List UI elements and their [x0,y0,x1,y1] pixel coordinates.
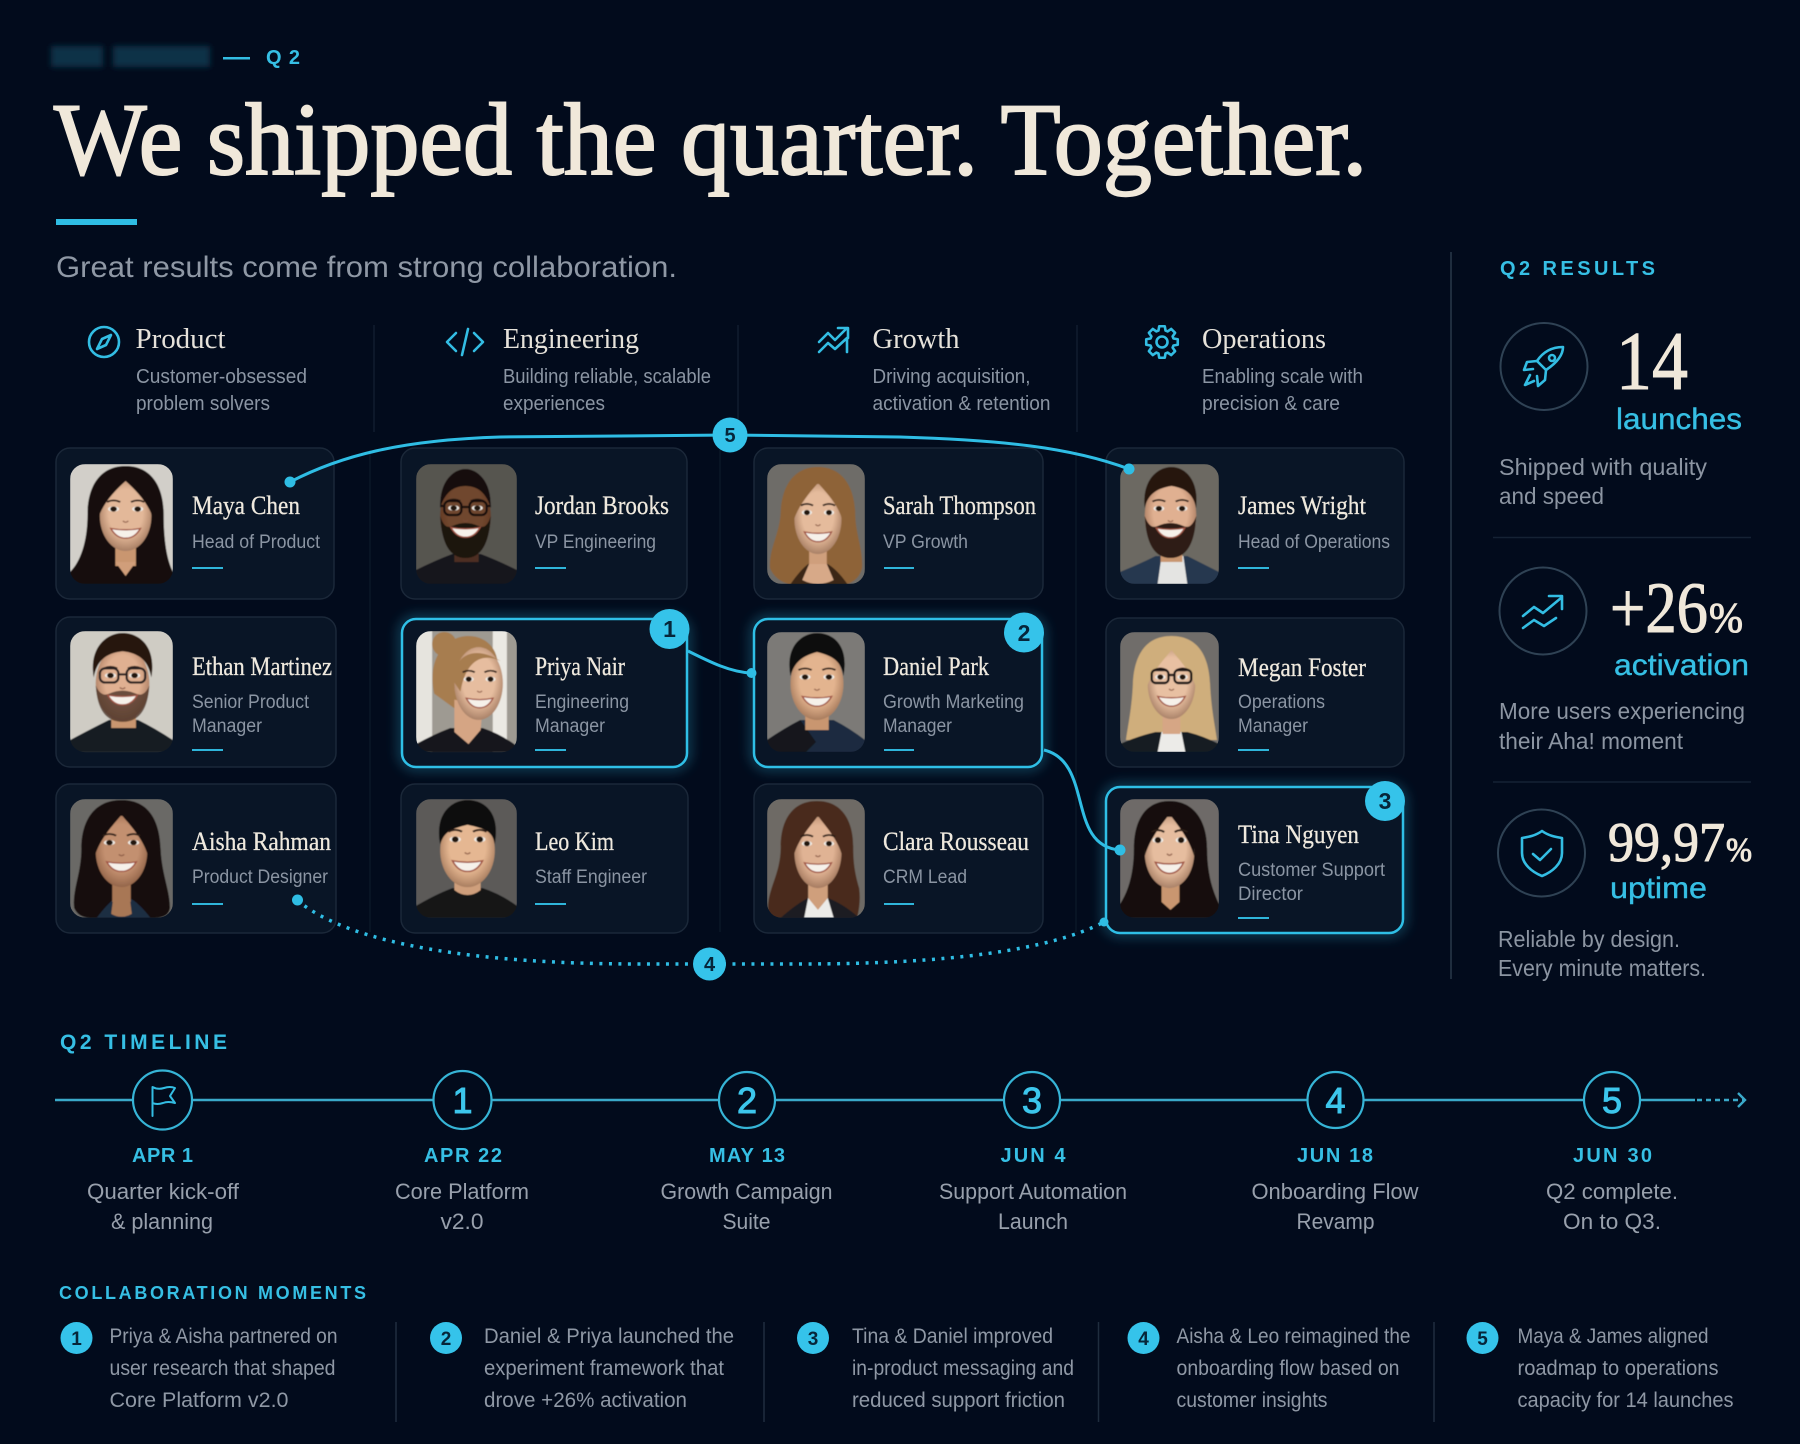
connectors [284,418,1405,980]
milestone: Jun 4 [939,1072,1127,1234]
connector 4: Aisha to Tina, dotted [292,894,1108,980]
portrait: Leo Kim [416,799,517,918]
milestone: Apr 1 [87,1070,240,1234]
stat: 14 launches: launches [1616,403,1742,436]
moment 4: onboarding flow based on [1176,1357,1400,1380]
card: Sarah Thompson [754,448,1043,599]
stat: 99,97% uptime: 99,97 [1608,812,1725,874]
card: Aisha Rahman: Product Designer [192,867,329,888]
milestone: Apr 22: v2.0 [440,1209,484,1234]
card: Ethan Martinez: Ethan Martinez [192,652,332,681]
card: Priya Nair (highlighted): Manager [535,716,606,737]
card: Tina Nguyen (highlighted): Tina Nguyen [1238,820,1359,849]
team header: Engineering [447,324,711,415]
header [51,46,1367,284]
card: Priya Nair (highlighted) [402,619,687,767]
icon: trend [1523,596,1562,628]
badge 2 [1004,612,1044,652]
badge 3: 3 [1379,788,1391,814]
card: Leo Kim: Leo Kim [535,827,614,856]
connector 1: Priya to Daniel [688,651,756,678]
card: Megan Foster: Manager [1238,716,1309,737]
moment 2 [430,1322,734,1412]
connector 5: Maya to James: 5 [724,425,736,447]
moment 2: experiment framework that [484,1357,724,1380]
card: Sarah Thompson: VP Growth [883,532,968,553]
card: Tina Nguyen (highlighted): Customer Support [1238,860,1386,881]
milestone: Apr 1: APR 1 [132,1145,193,1167]
stat: +26% activation: activation [1614,649,1749,682]
card: James Wright: Head of Operations [1238,532,1390,553]
moment 4: Aisha & Leo reimagined the [1176,1325,1410,1348]
milestone: May 13: MAY 13 [709,1145,785,1167]
portrait: Sarah Thompson [767,464,865,584]
moment 4 [1128,1322,1410,1412]
card: Leo Kim [401,784,688,933]
team header: Operations [1146,324,1363,415]
stat: 14 launches: Shipped with quality [1499,454,1708,480]
panel: Q2 results [1451,252,1752,981]
moment 5: Maya & James aligned [1518,1325,1708,1348]
moment 2: 2 [441,1329,451,1350]
card: Clara Rousseau: CRM Lead [883,867,967,888]
milestone: Jun 18: Onboarding Flow [1252,1179,1419,1204]
title: We shipped the quarter. Together. [54,83,1367,197]
moment 5: 5 [1477,1329,1488,1350]
portrait: Tina Nguyen [1120,799,1219,918]
stat: 99,97% uptime: uptime [1610,872,1707,905]
column headers [89,324,1363,415]
moment 3: 3 [808,1329,818,1350]
moment 1: 1 [71,1329,82,1350]
milestone: May 13 [660,1072,832,1234]
team header: Growth: activation & retention [872,393,1050,415]
timeline axis with arrow [55,1093,1745,1107]
moment 3: Tina & Daniel improved [852,1325,1053,1348]
card: Jordan Brooks: Jordan Brooks [535,491,669,520]
moment 4: customer insights [1176,1389,1328,1412]
connector 4: Aisha to Tina, dotted: 4 [704,954,716,976]
moment 2: drove +26% activation [484,1389,687,1412]
icon: shield [1522,831,1562,876]
moment 3 [797,1322,1074,1412]
team header: Growth [819,324,1050,415]
card: Maya Chen [56,448,334,599]
team header: Engineering: experiences [503,393,605,415]
stat: +26% activation [1499,568,1749,754]
card: Jordan Brooks: VP Engineering [535,532,656,553]
card: Megan Foster [1106,618,1404,767]
card: Leo Kim: Staff Engineer [535,867,648,888]
heading: Q2 timeline: Q2 TIMELINE [60,1031,227,1054]
icon: flag [152,1087,175,1116]
collaboration moments [59,1283,1734,1422]
stat: +26% activation: +26 [1610,568,1708,648]
milestone: May 13: Suite [722,1209,770,1234]
moment 4: 4 [1138,1329,1149,1350]
subtitle: Great results come from strong collaboration. [56,251,677,284]
timeline [55,1031,1745,1234]
moment 2: Daniel & Priya launched the [484,1325,734,1348]
moment 1: user research that shaped [110,1357,336,1380]
stat: 99,97% uptime: % [1726,832,1752,869]
eyebrow: redacted label with Q2 [51,46,300,69]
milestone: May 13: 2 [737,1080,757,1121]
card: Daniel Park (highlighted): Manager [883,716,953,737]
card: Megan Foster: Megan Foster [1238,653,1366,682]
card: Jordan Brooks [401,448,687,599]
icon: gear [1146,326,1178,358]
badge 2: 2 [1018,620,1030,646]
portrait: Aisha Rahman [70,799,173,918]
icon: compass [89,327,119,357]
card: Maya Chen: Maya Chen [192,491,300,520]
card: Priya Nair (highlighted): Engineering [535,692,629,713]
team header: Growth: Driving acquisition, [872,366,1030,388]
card: Aisha Rahman [56,784,336,933]
icon: growth chart [819,328,848,352]
portrait: James Wright [1120,464,1219,584]
card: Tina Nguyen (highlighted): Director [1238,884,1304,905]
card: Daniel Park (highlighted): Daniel Park [883,652,989,681]
stat: 14 launches: and speed [1499,483,1604,509]
portrait: Priya Nair [416,631,517,752]
milestone: Jun 30: Q2 complete. [1546,1179,1678,1204]
team header: Engineering: Building reliable, scalable [503,366,711,388]
team header: Product [89,324,307,415]
milestone: Apr 1: Quarter kick-off [87,1179,240,1204]
milestone: Jun 30: 5 [1602,1080,1622,1121]
milestone: Apr 22: 1 [452,1080,473,1121]
accent bar [56,219,137,225]
milestone: Apr 22 [395,1071,529,1234]
stat: +26% activation: their Aha! moment [1499,728,1684,754]
heading: collaboration moments: COLLABORATION MOMENTS [59,1283,366,1303]
badge 3 [1365,781,1405,821]
card: James Wright [1106,448,1404,599]
badge 1: 1 [663,616,676,642]
milestone: Jun 30: On to Q3. [1563,1209,1661,1234]
milestone: Apr 22: Core Platform [395,1179,529,1204]
portrait: Clara Rousseau [767,799,865,918]
moment 5: capacity for 14 launches [1518,1389,1734,1412]
stat: 99,97% uptime [1498,810,1752,981]
team header: Engineering: Engineering [503,324,639,355]
stat: +26% activation: % [1709,596,1743,642]
moment 1: Core Platform v2.0 [110,1389,288,1412]
portrait: Ethan Martinez [70,631,173,752]
milestone: Jun 18 [1252,1072,1419,1234]
stat: 14 launches [1499,315,1742,509]
team header: Product: Product [136,324,226,355]
eyebrow: redacted label with Q2: Q2 [266,47,300,69]
milestone: Jun 18: JUN 18 [1297,1145,1373,1167]
milestone: Jun 30 [1546,1072,1678,1234]
team header: Operations: precision & care [1202,393,1340,415]
card: Daniel Park (highlighted) [754,619,1042,767]
team header: Product: problem solvers [136,393,270,415]
card: Ethan Martinez [56,617,336,767]
connector 5: Maya to James [284,418,1134,488]
portrait: Jordan Brooks [416,464,517,584]
card: Daniel Park (highlighted): Growth Marketing [883,692,1024,713]
card: Clara Rousseau: Clara Rousseau [883,827,1029,856]
moment 5: roadmap to operations [1518,1357,1718,1380]
portrait: Daniel Park [767,632,865,752]
card: Sarah Thompson: Sarah Thompson [883,491,1036,520]
card: Tina Nguyen (highlighted) [1106,787,1403,933]
moment 5 [1466,1322,1734,1412]
card: Ethan Martinez: Manager [192,716,263,737]
card: Aisha Rahman: Aisha Rahman [192,827,331,856]
stat: +26% activation: More users experiencing [1499,698,1745,724]
stat: 14 launches: 14 [1616,315,1688,408]
card: Clara Rousseau [754,784,1043,933]
milestone: Jun 4: Support Automation [939,1179,1127,1204]
connector 3: Daniel to Tina [1044,750,1126,856]
card: Megan Foster: Operations [1238,692,1325,713]
icon: rocket [1524,347,1563,386]
highlight glows [402,619,1403,933]
card: Priya Nair (highlighted): Priya Nair [535,652,625,681]
team header: Product: Customer-obsessed [136,366,307,388]
icon: code [447,329,483,355]
milestone: Apr 22: APR 22 [424,1145,502,1167]
moment 3: reduced support friction [852,1389,1065,1412]
team header: Operations: Enabling scale with [1202,366,1363,388]
milestone: Apr 1: & planning [111,1209,213,1234]
stat: 99,97% uptime: Every minute matters. [1498,955,1706,981]
portrait: Maya Chen [70,464,173,584]
moment 1 [60,1322,338,1412]
milestone: Jun 18: 4 [1325,1080,1346,1121]
card: James Wright: James Wright [1238,491,1367,520]
milestone: Jun 30: JUN 30 [1573,1145,1652,1167]
card: Ethan Martinez: Senior Product [192,692,310,713]
team header: Operations: Operations [1202,324,1326,355]
heading: Q2 results: Q2 RESULTS [1500,258,1655,280]
team header: Growth: Growth [872,324,960,355]
milestone: May 13: Growth Campaign [660,1179,832,1204]
portrait: Megan Foster [1120,632,1219,752]
milestone: Jun 4: 3 [1022,1080,1042,1121]
milestone: Jun 4: JUN 4 [1000,1145,1066,1167]
stat: 99,97% uptime: Reliable by design. [1498,926,1680,952]
card: Maya Chen: Head of Product [192,532,321,553]
badge 1 [650,609,690,649]
moment 3: in-product messaging and [852,1357,1074,1380]
milestone: Jun 18: Revamp [1296,1209,1374,1234]
milestone: Jun 4: Launch [998,1209,1068,1234]
moment 1: Priya & Aisha partnered on [110,1325,338,1348]
